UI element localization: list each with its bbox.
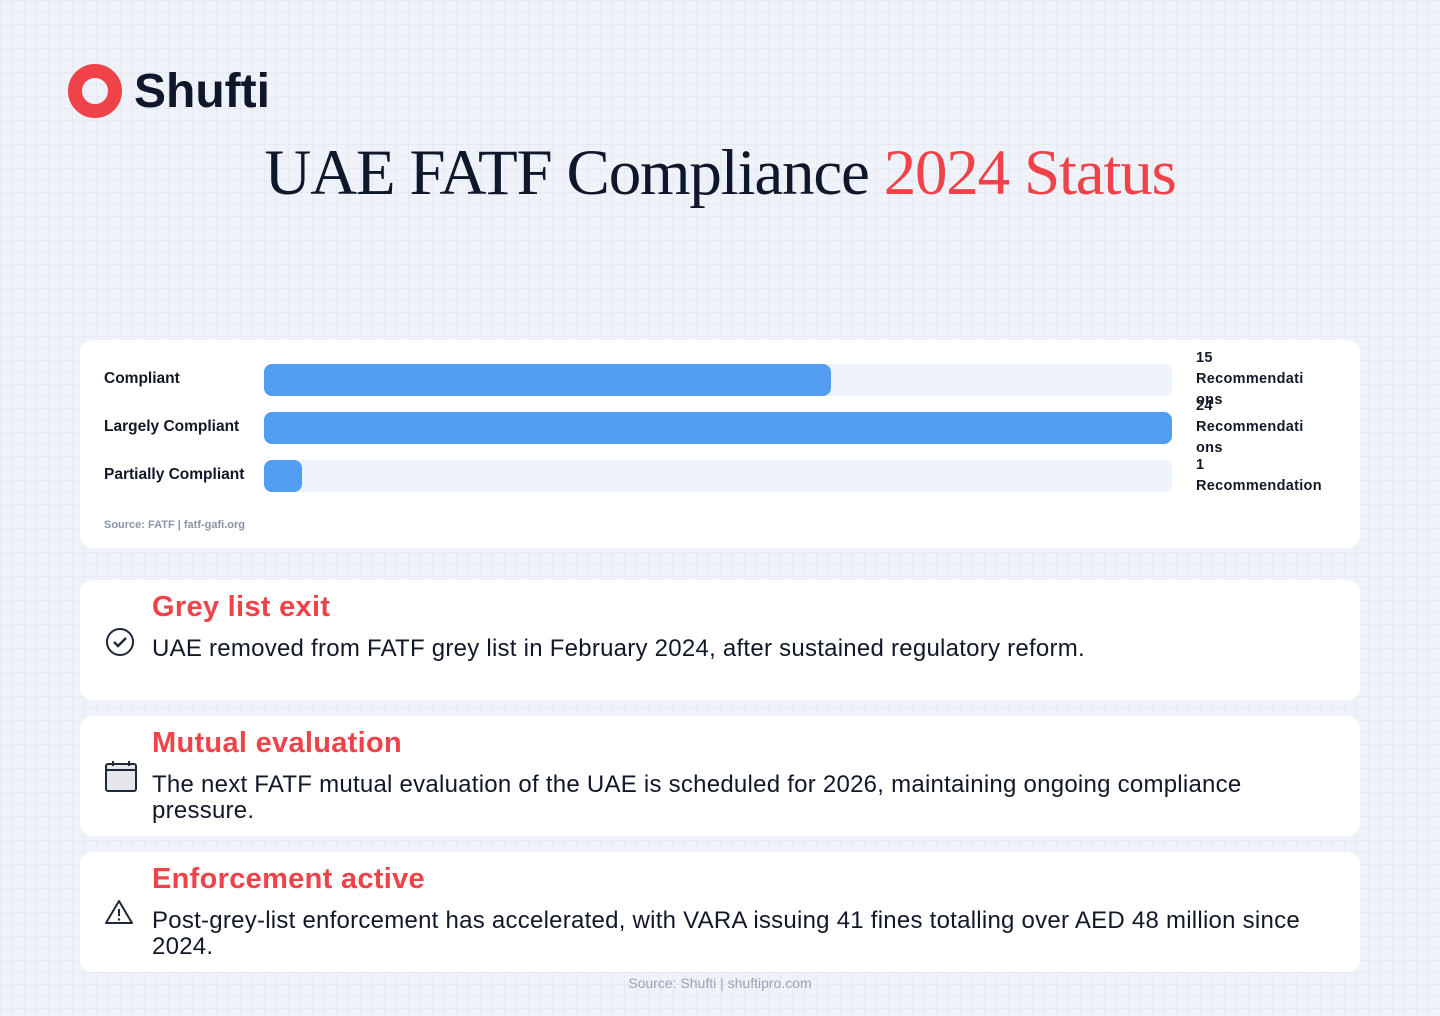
panel: bar chart: Partially Compliant (104, 466, 244, 483)
panel: mutual evaluation: The next FATF mutual evaluation of the UAE is scheduled for 2026, maintaining ongoing compliance pressure. (152, 771, 1242, 824)
icon: calendar (105, 761, 137, 792)
panel: enforcement active (80, 852, 1360, 972)
logo: Shufti (134, 65, 270, 118)
logo (68, 64, 270, 118)
chart source: Source: FATF | fatf-gafi.org (104, 519, 245, 531)
panel: bar chart: 24 (1196, 398, 1213, 414)
panel: bar chart (80, 340, 1360, 548)
panel: grey list exit: Grey list exit (152, 591, 330, 623)
title: UAE FATF Compliance 2024 Status (264, 137, 1176, 209)
panel: enforcement active: Enforcement active (152, 863, 425, 895)
icon: warning (105, 900, 133, 924)
bar: partially compliant (104, 457, 1322, 494)
panel: bar chart: 15 (1196, 350, 1213, 366)
panel: grey list exit (80, 580, 1360, 700)
icon: check (106, 628, 134, 656)
footer source: Source: Shufti | shuftipro.com (628, 975, 812, 991)
bar: largely compliant (104, 398, 1304, 456)
panel: bar chart: Compliant (104, 370, 180, 387)
panel: bar chart: ons (1196, 392, 1223, 408)
panel: grey list exit: UAE removed from FATF grey list in February 2024, after sustained regulatory reform. (152, 635, 1085, 662)
bar: compliant (104, 350, 1304, 408)
panel: mutual evaluation (80, 716, 1360, 836)
panel: enforcement active: Post-grey-list enforcement has accelerated, with VARA issuing 41 fines totalling over AED 48 million since 2024. (152, 907, 1300, 960)
panel: bar chart: ons (1196, 440, 1223, 456)
panel: mutual evaluation: Mutual evaluation (152, 727, 402, 759)
panel: bar chart: Recommendati (1196, 371, 1304, 387)
panel: bar chart: 1 (1196, 457, 1204, 473)
panel: bar chart: Recommendation (1196, 478, 1322, 494)
panel: bar chart: Largely Compliant (104, 418, 239, 435)
panel: bar chart: Recommendati (1196, 419, 1304, 435)
